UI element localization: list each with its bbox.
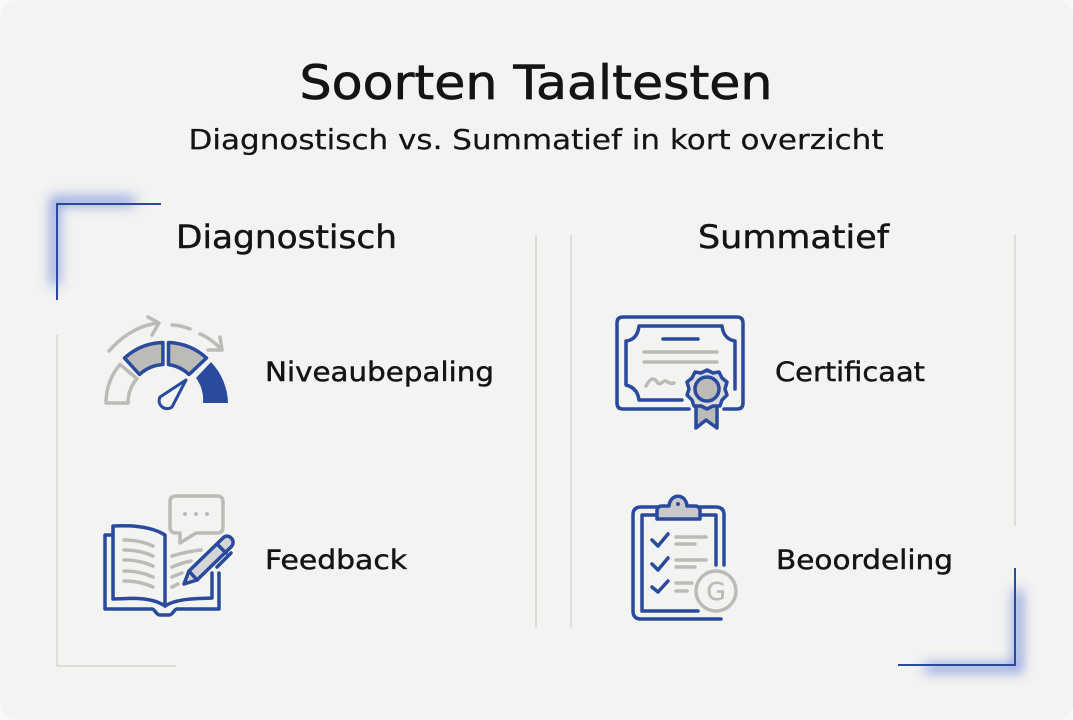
icon: certificate [617,317,743,428]
divider: left column right edge [535,235,537,628]
icon: clipboard with grade [633,496,736,619]
icon: gauge [106,317,228,409]
heading: Summatief: Summatief [698,218,890,256]
frame: left grey lines [57,335,176,666]
icon: clipboard with grade: G [706,577,726,606]
divider: right column left edge [570,235,572,628]
book [105,535,219,615]
frame corner: top left blue glow [55,201,161,300]
title: Soorten Taaltesten [300,56,772,111]
label: Certificaat: Certificaat [775,357,925,388]
label: Niveaubepaling: Niveaubepaling [265,357,494,388]
icon: open book with feedback [105,496,233,615]
subtitle: Diagnostisch vs. Summatief in kort overzicht [188,123,884,156]
frame: right grey line [1014,235,1016,526]
heading: Diagnostisch: Diagnostisch [176,218,397,256]
frame corner: bottom right blue glow [898,568,1018,668]
label: Beoordeling: Beoordeling [776,545,953,576]
panel: Diagnostisch [105,218,494,615]
speech bubble [170,496,223,543]
pen [184,536,233,584]
panel: Summatief [617,218,953,619]
label: Feedback: Feedback [265,545,407,576]
